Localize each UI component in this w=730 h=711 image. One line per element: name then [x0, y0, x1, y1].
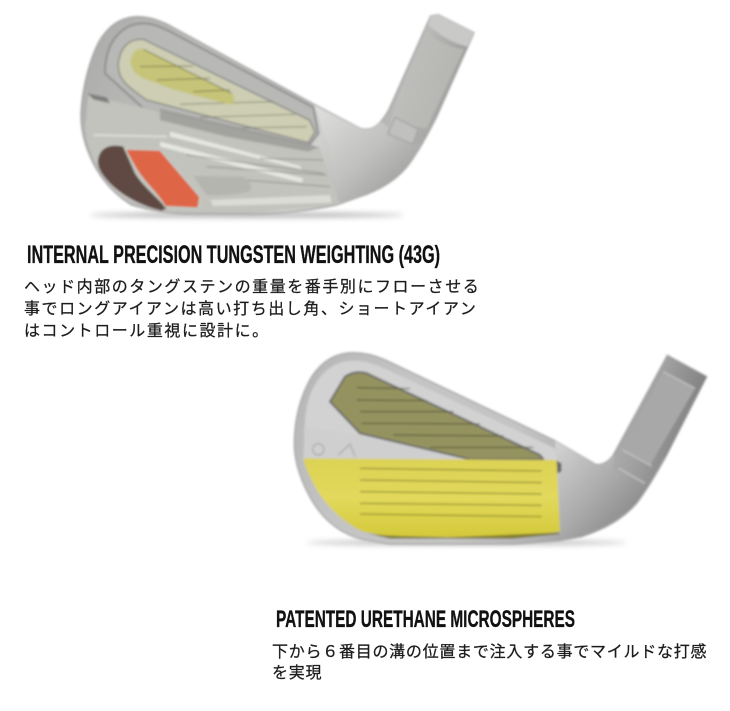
- top rim: [105, 23, 318, 146]
- text block: urethane description: [272, 643, 707, 682]
- upper cavity panel: [118, 39, 315, 143]
- text block: urethane description: を実現: [272, 665, 322, 682]
- urethane fill: [303, 458, 560, 537]
- text block: urethane description: 下から６番目の溝の位置まで注入する事でマイルドな打感: [272, 644, 707, 661]
- golf iron: urethane microspheres cutaway: [294, 353, 707, 545]
- text block: tungsten description: 事でロングアイアンは高い打ち出し角、ショートアイアン: [24, 301, 477, 318]
- lower body shade: [85, 95, 339, 212]
- club head body: [294, 353, 707, 544]
- internal ribs: [170, 132, 302, 169]
- dark band across toe: [87, 93, 110, 103]
- hosel: [613, 355, 707, 487]
- tungsten reflection: [131, 49, 234, 105]
- upper panel score lines: [357, 388, 533, 447]
- upper panel score lines: [180, 102, 307, 128]
- tungsten weight: [125, 149, 200, 208]
- ground shadow: [90, 213, 403, 217]
- lower groove lines: [187, 155, 330, 187]
- upper cavity panel: [330, 372, 543, 459]
- heel screw: [557, 461, 561, 473]
- text block: tungsten description: ヘッド内部のタングステンの重量を番手別にフローさせる: [24, 279, 480, 296]
- hosel: [387, 15, 474, 145]
- rear toe panel: [304, 427, 460, 459]
- urethane score lines: [360, 468, 542, 517]
- neck and heel: [555, 441, 643, 537]
- heading: tungsten weighting: INTERNAL PRECISION TUNGSTEN WEIGHTING (43G): [27, 241, 440, 269]
- text block: tungsten description: はコントロール重視に設計に。: [24, 323, 270, 340]
- text block: tungsten description: [24, 278, 480, 340]
- shaded rim under the fill: [360, 532, 560, 539]
- club head body: [81, 15, 474, 214]
- golf iron: tungsten weighting cutaway: [81, 15, 474, 217]
- inner rim: [303, 361, 557, 460]
- heading: urethane microspheres: PATENTED URETHANE MICROSPHERES: [276, 606, 575, 633]
- toe badge: [313, 444, 355, 457]
- neck and heel: [314, 105, 423, 204]
- ground shadow: [307, 541, 627, 545]
- inner pocket: [193, 176, 251, 195]
- tungsten weight back shade: [98, 146, 167, 211]
